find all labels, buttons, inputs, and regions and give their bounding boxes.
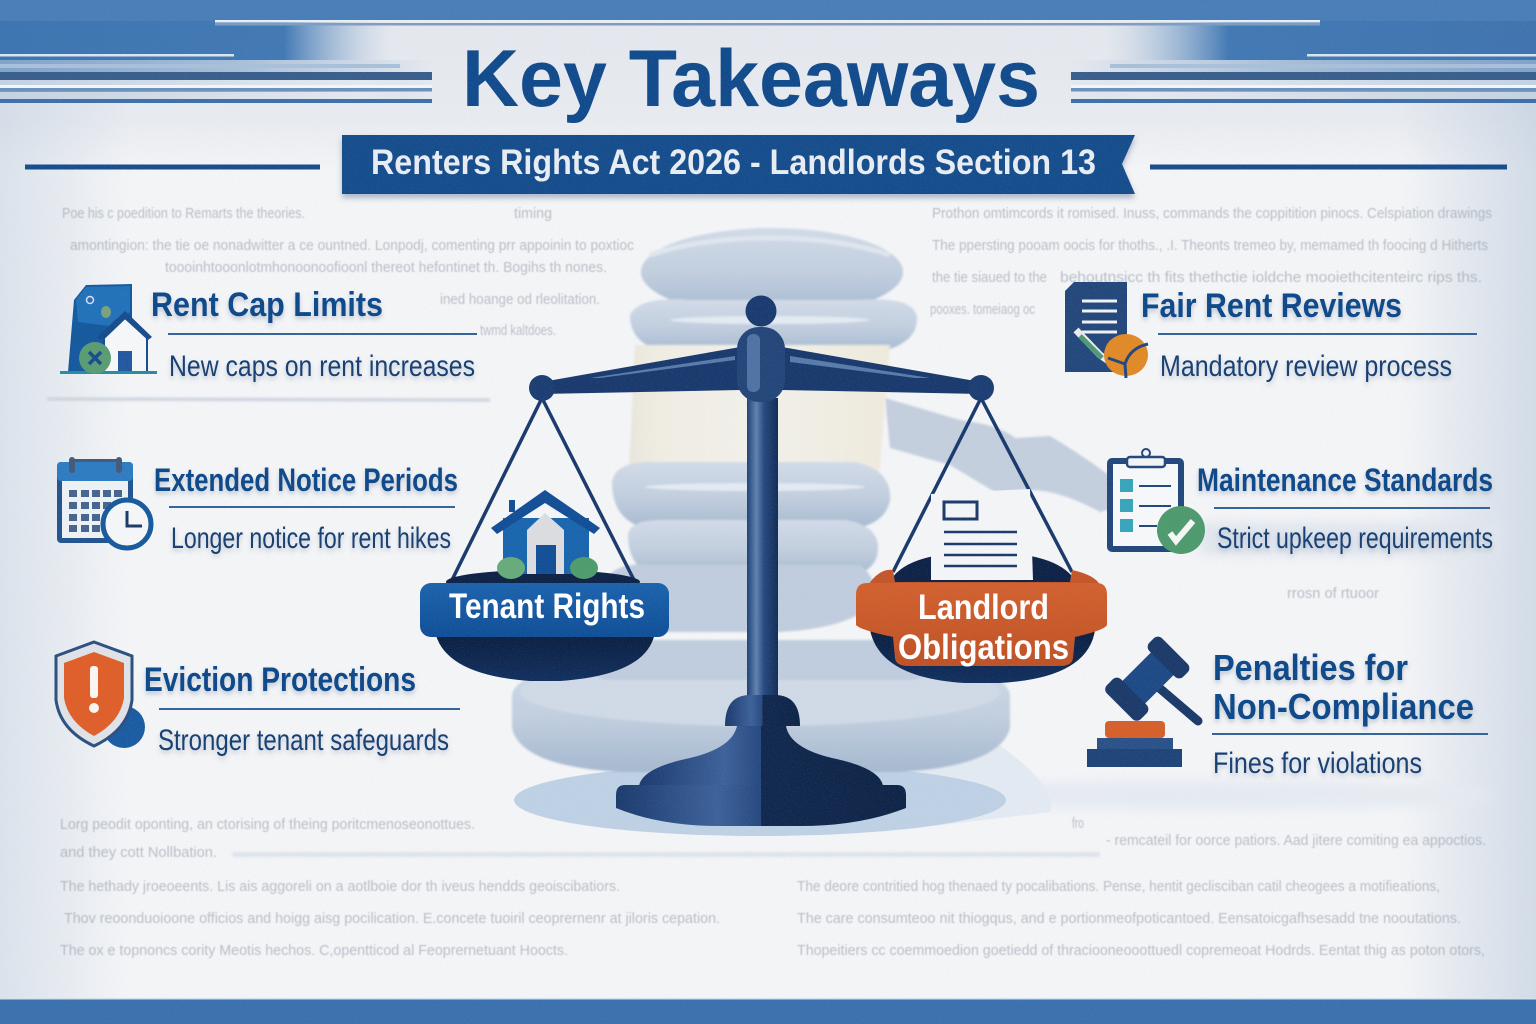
- finial: [746, 296, 776, 326]
- label: landlord obligations: Obligations: [898, 628, 1069, 667]
- pan bowl: [435, 632, 655, 681]
- header band: [0, 0, 1536, 103]
- description: Stronger tenant safeguards: [158, 724, 449, 757]
- pan bowl: [870, 630, 1095, 683]
- icon: house: [491, 490, 600, 579]
- icon: folder with house: [60, 284, 157, 374]
- left chains: [452, 398, 634, 580]
- faint background text: pooxes. tomeiaog oc: [930, 301, 1035, 318]
- heading: Eviction Protections: [144, 661, 416, 699]
- bottom band: [0, 998, 1536, 1024]
- pan back: [886, 552, 1080, 595]
- label: tenant rights: Tenant Rights: [449, 587, 645, 626]
- icon: document and tool: [1065, 282, 1148, 378]
- icon: clipboard: [1107, 449, 1205, 554]
- faint background text: rrosn of rtuoor: [1287, 585, 1379, 602]
- base plinth: [616, 785, 906, 826]
- heading: [1213, 647, 1474, 727]
- faint background text: amontingion: the tie oe nonadwitter a ce ountned. Lonpodj, comenting prr appoinin to poxtioc: [70, 237, 634, 254]
- description: Fines for violations: [1213, 747, 1422, 780]
- label: landlord obligations: Landlord: [918, 588, 1049, 627]
- base dome: [639, 726, 883, 786]
- faint background text: The ox e topnoncs cority Meotis hechos. C,opentticod al Feoprernetuant Hoocts.: [60, 942, 568, 959]
- faint background text: fro: [1072, 815, 1084, 832]
- beam end left: [529, 375, 555, 401]
- gavel handle: [885, 398, 1125, 512]
- sub shadow: [1200, 522, 1500, 556]
- faint background text: timing: [514, 205, 552, 222]
- faint background text: Poe his c poedition to Remarts the theories.: [62, 205, 305, 222]
- scale column: [747, 398, 778, 698]
- faint background text: and they cott Nollbation.: [60, 844, 217, 861]
- faint background text: toooinhtooonlotmhonoonoofioonl thereot hefontinet th. Bogihs th nones.: [165, 259, 607, 276]
- panel: extended notice periods: [47, 457, 458, 584]
- pan label: [856, 583, 1107, 666]
- heading: Fair Rent Reviews: [1141, 287, 1402, 325]
- faint background text: Lorg peodit oponting, an ctorising of theing poritcmenoseonottues.: [60, 816, 475, 833]
- faint background text: behoutnsicc th fits thethctie ioldche mooiethcitenteirc rips ths.: [1060, 269, 1482, 286]
- panel: fair rent reviews: [1040, 282, 1485, 401]
- icon: document: [931, 489, 1033, 580]
- pan label: [420, 583, 669, 637]
- beam end right: [968, 375, 994, 401]
- heading: Non-Compliance: [1213, 686, 1474, 727]
- faint background text: The care consumteoo nit thiogqus, and e portionmeofpoticantoed. Eensatoicgafhsesadd tne nooutations.: [797, 910, 1461, 927]
- faint background text: the tie siaued to the: [932, 269, 1047, 286]
- subtitle ribbon: [342, 135, 1135, 194]
- faint background text: - remcateil for oorce patiors. Aad jitere comiting ea appoctios.: [1106, 832, 1486, 849]
- faint background text: The ppersting pooam oocis for thoths., .I. Theonts tremeo by, memamed th foocing d Hitherts: [932, 237, 1488, 254]
- pan rim: [868, 570, 1100, 585]
- faint background text: Thopeitiers cc coemmoedion goetiedd of thraciooneooottuedl copremeoat Hodrds. Eentat thig as poton otors,: [797, 942, 1485, 959]
- subtitle ribbon: Renters Rights Act 2026 - Landlords Section 13: [371, 143, 1096, 182]
- heading: Extended Notice Periods: [154, 462, 458, 498]
- subtitle side rule left: [25, 164, 320, 170]
- center pillar cap: [737, 327, 785, 402]
- background gavel watermark: [512, 228, 1495, 836]
- panel: penalties for non-compliance: [1087, 634, 1488, 780]
- faint background text: Prothon omtimcords it romised. Inuss, commands the coppitition pinocs. Celspiation drawings: [932, 205, 1492, 222]
- title: Key Takeaways: [462, 34, 1040, 124]
- subtitle side rule right: [1150, 164, 1507, 170]
- heading: Rent Cap Limits: [151, 286, 383, 324]
- label: landlord obligations: [898, 588, 1069, 667]
- icon: shield: [56, 642, 145, 748]
- collar: [725, 695, 800, 726]
- landlord obligations pan: [856, 489, 1107, 683]
- balance scale: [452, 296, 1072, 826]
- description: Longer notice for rent hikes: [171, 522, 451, 555]
- base shadow: [925, 780, 1495, 810]
- sounding block: [512, 640, 1010, 772]
- scale beam: [542, 347, 981, 394]
- faint long divider: [232, 852, 1100, 857]
- faint background text: ined hoange od rleolitation.: [440, 291, 600, 308]
- icon: calendar and clock: [57, 457, 151, 548]
- panel: eviction protections: [47, 642, 470, 787]
- heading: Penalties for: [1213, 647, 1408, 688]
- faint background text: Thov reoonduoioone officios and hoigg aisg pocilication. E.concete tuoiril ceoprernenr at jiloris cepation.: [64, 910, 720, 927]
- tenant rights pan: [420, 490, 669, 681]
- icon: gavel on block: [1087, 634, 1198, 767]
- description: Mandatory review process: [1160, 350, 1452, 383]
- panel: rent cap limits: [47, 284, 490, 400]
- pan top: [446, 570, 640, 594]
- faint background text: The deore contritied hog thenaed ty pocalibations. Pense, hentit geclisciban catil cheogees a motifieations,: [797, 878, 1440, 895]
- gavel head: [610, 228, 917, 632]
- right chains: [893, 398, 1072, 572]
- faint background text: twmd kaltdoes.: [480, 322, 556, 339]
- faint background text: [60, 205, 1492, 959]
- panel: maintenance standards: [1107, 449, 1500, 590]
- faint background text: The hethady jroeoeents. Lis ais aggoreli on a aotlboie dor th iveus hendds geoiscibatiors.: [60, 878, 620, 895]
- description: New caps on rent increases: [169, 350, 475, 383]
